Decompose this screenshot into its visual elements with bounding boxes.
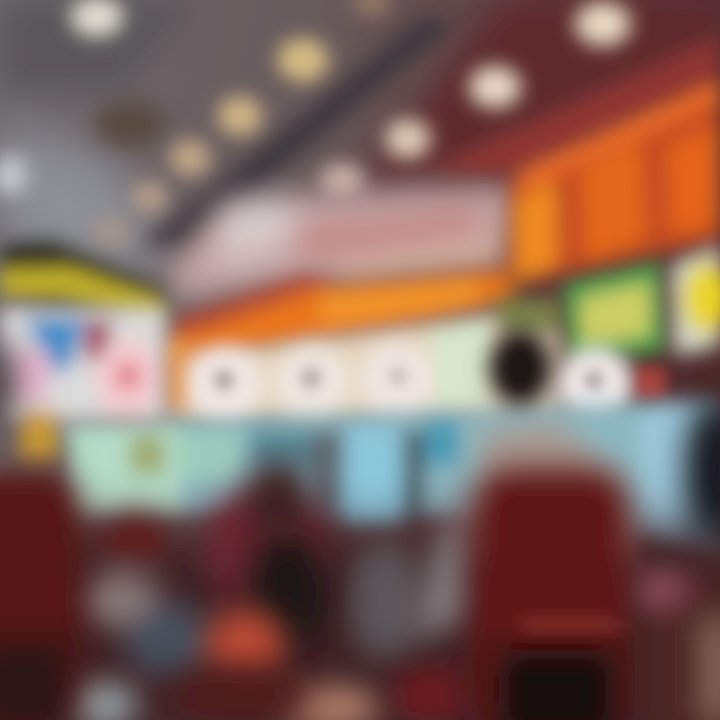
red diagonal band above the signs [430, 35, 720, 175]
dark diagonal ceiling beam [140, 15, 455, 245]
green menu board [565, 262, 665, 362]
person on the left in red [0, 340, 82, 720]
man on the right in red shirt [410, 330, 630, 720]
round white logos row [187, 342, 665, 423]
white sign board with red lettering [170, 185, 515, 300]
dark person at far right [640, 400, 720, 720]
yellow arch on left [0, 240, 165, 325]
crowd at the bottom [0, 512, 720, 720]
yellow menu board [672, 245, 720, 355]
ceiling lights [0, 0, 630, 246]
pale menu section near centre [165, 300, 560, 420]
colourful left kiosk [0, 308, 165, 460]
orange diagonal band [170, 270, 515, 365]
orange sign panels top right [510, 78, 720, 285]
woman in centre crowd [170, 460, 466, 720]
light blue lower counter band [60, 400, 720, 560]
